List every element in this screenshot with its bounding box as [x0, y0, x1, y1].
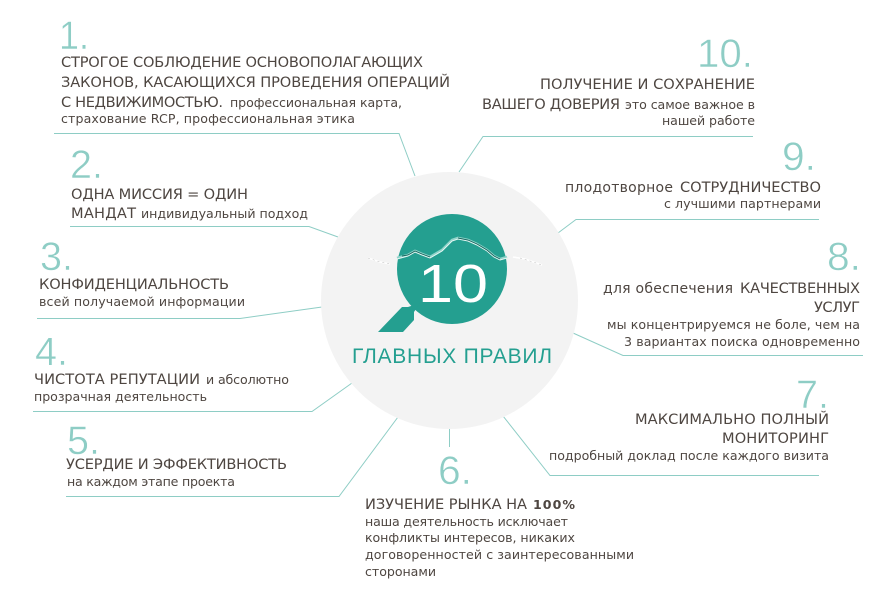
number 5: 5. [67, 419, 100, 463]
rule 5 [66, 419, 287, 489]
text of rule 9: плодотворное [565, 180, 673, 196]
text of rule 1: ЗАКОНОВ, КАСАЮЩИХСЯ ПРОВЕДЕНИЯ ОПЕРАЦИЙ [61, 73, 450, 91]
text of rule 10 [482, 76, 755, 128]
number 9: 9. [782, 135, 816, 179]
number 3: 3. [40, 235, 73, 279]
text of rule 4: прозрачная деятельность [34, 389, 207, 404]
logo number: 10 [418, 254, 488, 314]
text of rule 5: на каждом этапе проекта [67, 474, 235, 489]
text of rule 10: нашей работе [662, 113, 755, 128]
text of rule 8: УСЛУГ [814, 299, 860, 316]
text of rule 6: 100% [533, 497, 575, 512]
text of rule 2 [71, 186, 308, 222]
text of rule 2: ОДНА МИССИЯ = ОДИН [71, 186, 248, 203]
text of rule 2: индивидуальный подход [141, 206, 308, 221]
text of rule 6: сторонами [365, 564, 436, 579]
number 1: 1. [59, 14, 89, 58]
rule 9 [565, 135, 821, 211]
text of rule 8: для обеспечения [603, 281, 733, 297]
number 2: 2. [70, 143, 103, 187]
rule 6 [365, 449, 634, 579]
text of rule 1: профессиональная карта, [230, 95, 402, 110]
text of rule 7: МАКСИМАЛЬНО ПОЛНЫЙ [635, 410, 829, 428]
central title: ГЛАВНЫХ ПРАВИЛ [352, 345, 552, 368]
text of rule 6: наша деятельность исключает [365, 514, 568, 529]
text of rule 8: мы концентрируемся не боле, чем на [607, 317, 860, 332]
text of rule 8: 3 вариантах поиска одновременно [624, 334, 860, 349]
number 4: 4. [35, 330, 68, 374]
text of rule 1: страхование RCP, профессиональная этика [61, 111, 355, 126]
text of rule 7: подробный доклад после каждого визита [549, 448, 829, 463]
text of rule 6: договоренностей с заинтересованными [365, 547, 634, 562]
number 8: 8. [827, 235, 861, 279]
number 7: 7. [796, 373, 829, 417]
text of rule 1: С НЕДВИЖИМОСТЬЮ. [61, 94, 223, 111]
text of rule 3: всей получаемой информации [39, 294, 245, 309]
leader lines [33, 134, 863, 496]
text of rule 4: и абсолютно [206, 372, 289, 387]
text of rule 4 [34, 371, 289, 404]
text of rule 9 [565, 179, 821, 211]
text of rule 10: ПОЛУЧЕНИЕ И СОХРАНЕНИЕ [540, 76, 755, 93]
number 6: 6. [438, 449, 472, 493]
text of rule 3 [39, 276, 245, 309]
text of rule 5: УСЕРДИЕ И ЭФФЕКТИВНОСТЬ [66, 456, 287, 473]
rule 7 [549, 373, 829, 463]
text of rule 5 [66, 456, 287, 489]
rule 10 [482, 32, 755, 128]
rule 1 [59, 14, 450, 126]
text of rule 1 [61, 54, 450, 126]
rule 3 [39, 235, 245, 309]
text of rule 3: КОНФИДЕНЦИАЛЬНОСТЬ [39, 276, 229, 293]
text of rule 9: СОТРУДНИЧЕСТВО [680, 179, 821, 196]
text of rule 8 [603, 280, 860, 349]
central grey circle [321, 172, 578, 429]
text of rule 6: ИЗУЧЕНИЕ РЫНКА НА [365, 496, 527, 513]
logo: magnifier with mountain line [368, 214, 542, 332]
text of rule 7: МОНИТОРИНГ [722, 430, 829, 447]
number 10: 10. [697, 32, 753, 76]
text of rule 6: конфликты интересов, никаких [365, 530, 576, 545]
rule 4 [34, 330, 289, 404]
text of rule 4: ЧИСТОТА РЕПУТАЦИИ [34, 371, 200, 388]
text of rule 7 [549, 410, 829, 463]
rule 2 [70, 143, 308, 222]
text of rule 10: это самое важное в [625, 97, 755, 112]
text of rule 8: КАЧЕСТВЕННЫХ [740, 280, 860, 297]
text of rule 2: МАНДАТ [71, 205, 136, 222]
text of rule 1: СТРОГОЕ СОБЛЮДЕНИЕ ОСНОВОПОЛАГАЮЩИХ [61, 54, 423, 71]
text of rule 6 [365, 496, 634, 579]
rule 8 [603, 235, 861, 349]
text of rule 10: ВАШЕГО ДОВЕРИЯ [482, 96, 620, 113]
text of rule 9: с лучшими партнерами [664, 196, 821, 211]
